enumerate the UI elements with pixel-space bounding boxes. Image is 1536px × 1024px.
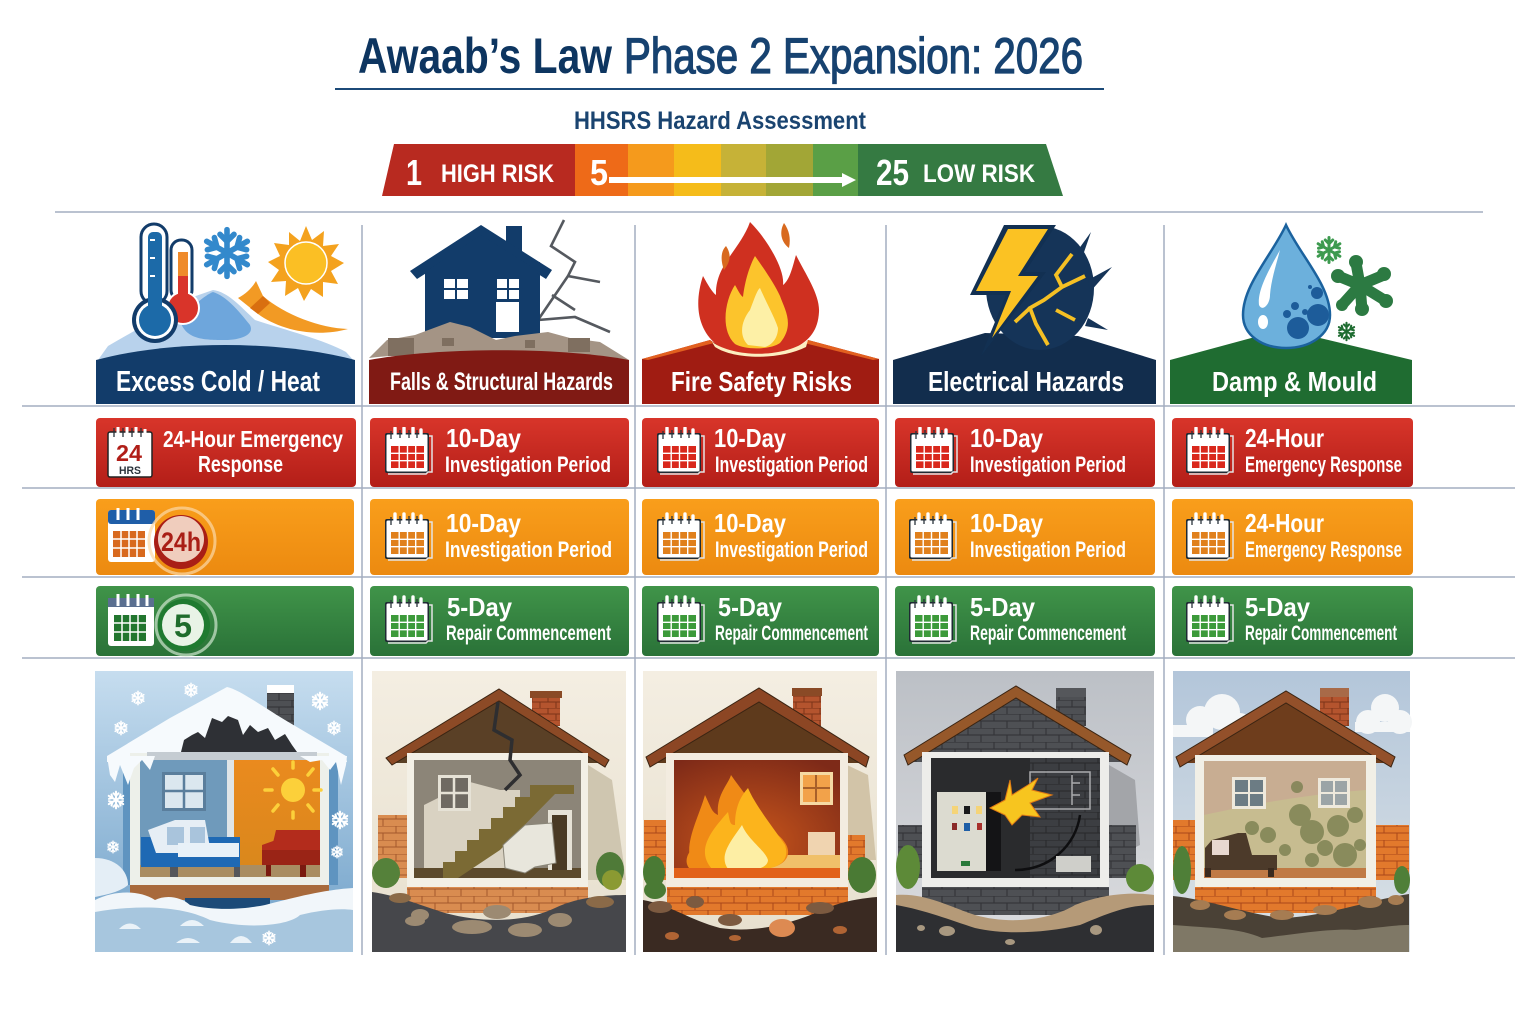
icon: snow mound (98, 290, 355, 362)
row 1 card: Falls 10-day: 10-Day (446, 423, 521, 453)
bushes (643, 856, 876, 899)
icon: calendar (385, 597, 432, 643)
stones (917, 925, 1102, 945)
icon: sun (268, 226, 344, 301)
column 5: Damp & Mould header: Damp & Mould (1212, 366, 1377, 397)
rubble (1190, 895, 1404, 920)
icon: yellow cracks (1015, 254, 1085, 345)
icon: 5 badge (156, 595, 216, 655)
row 3 card: Fire 5-day: Repair Commencement (715, 622, 868, 645)
icon: small thermometer (167, 240, 199, 324)
icon: calendar (909, 597, 956, 643)
window (800, 772, 833, 805)
row 2 card: Electrical 10-day: 10-Day (970, 508, 1043, 538)
row 1 card: Excess Cold 24-hour: 24-Hour Emergency (163, 426, 343, 452)
icon: 24 HRS calendar (108, 427, 152, 477)
icon: calendar (385, 514, 432, 560)
red armchair (262, 830, 320, 877)
icon: 5 badge: 5 (174, 608, 192, 644)
rubble (648, 896, 847, 941)
banner (893, 333, 1156, 404)
row 3 card: Electrical 5-day: 5-Day (970, 592, 1035, 622)
electrical cabinet (937, 792, 1001, 871)
column 4: Electrical Hazards header (893, 225, 1156, 404)
row 2 card: Falls 10-day: 10-Day (446, 508, 521, 538)
crack (494, 702, 520, 790)
icon: calendar (910, 428, 957, 474)
row 1 card: Damp 24-hour: 24-Hour (1245, 423, 1324, 453)
flames (687, 775, 788, 869)
banner (642, 340, 879, 404)
windows (1232, 777, 1350, 809)
icon: calendar (1186, 514, 1233, 560)
risk scale bar: 1 (406, 152, 422, 193)
bed (770, 832, 840, 871)
row 1 card: Fire 10-day: Investigation Period (715, 452, 868, 477)
row 3 card: Damp 5-day: Repair Commencement (1245, 622, 1397, 645)
icon: 24 HRS calendar: 24 (116, 440, 142, 466)
risk scale bar (382, 144, 1063, 196)
icon: calendar (657, 428, 704, 474)
row 3 card: Falls 5-day (370, 586, 629, 656)
row 1 card: Electrical 10-day (895, 418, 1155, 487)
icon: calendar (1186, 428, 1233, 474)
column 4: Electrical Hazards header: Electrical Hazards (928, 366, 1124, 397)
attic (181, 716, 297, 752)
icon: orange swoosh (238, 281, 348, 333)
row 2 card: Electrical 10-day (895, 499, 1155, 575)
staircase (443, 785, 574, 878)
icon: calendar (909, 514, 956, 560)
bushes (1173, 846, 1410, 894)
illustration: electrical house (896, 671, 1154, 952)
illustration: falls and structural house (372, 671, 626, 952)
icon: 24h badge: 24h (161, 527, 201, 557)
sun (265, 762, 321, 818)
row 3 card: Damp 5-day (1172, 586, 1413, 656)
icon: large thermometer (132, 224, 178, 343)
arrow: risk direction (609, 173, 856, 187)
icon: house (410, 225, 552, 338)
row 3 card: Fire 5-day (642, 586, 879, 656)
row 3 card: Fire 5-day: 5-Day (718, 592, 782, 622)
column 1: Excess Cold / Heat header: Excess Cold / Heat (116, 366, 320, 398)
illustration: fire house (643, 671, 877, 952)
column 2: Falls & Structural Hazards header: Falls & Structural Hazards (390, 368, 613, 396)
sofa (1205, 833, 1277, 877)
icicles (107, 756, 347, 785)
rubble (389, 893, 614, 937)
title: Phase 2 Expansion: 2026 (624, 28, 1083, 84)
mould blotches (1245, 781, 1366, 867)
row 2 card: Fire 10-day: 10-Day (714, 508, 786, 538)
snowflakes (108, 683, 347, 945)
risk scale bar: 25 (876, 152, 909, 193)
risk scale bar: 5 (590, 152, 608, 193)
row 3 card: Damp 5-day: 5-Day (1245, 592, 1310, 622)
row 1 card: Electrical 10-day: Investigation Period (970, 452, 1126, 477)
row 1 card: Fire 10-day: 10-Day (714, 423, 786, 453)
row 3 card: Electrical 5-day: Repair Commencement (970, 622, 1126, 645)
column 3: Fire Safety Risks header: Fire Safety Risks (671, 366, 852, 397)
clouds (1173, 694, 1412, 737)
icon: calendar (1186, 597, 1233, 643)
risk scale bar: LOW RISK (923, 160, 1035, 188)
icon: small mould spore (1318, 238, 1340, 262)
row 1 card: Falls 10-day (370, 418, 629, 487)
row 2 card: Falls 10-day: Investigation Period (445, 537, 612, 562)
icon: calendar (108, 508, 155, 562)
row 1 card: Falls 10-day: Investigation Period (445, 452, 611, 477)
icon: calendar (657, 597, 704, 643)
icon: snowflake (207, 230, 247, 276)
icon: calendar (108, 594, 154, 646)
icon: water drop (1243, 225, 1330, 348)
illustration: damp and mould house (1173, 671, 1412, 952)
subtitle: HHSRS Hazard Assessment: HHSRS Hazard Assessment (574, 107, 867, 135)
row 3 card: Excess Cold 5-day (96, 586, 354, 656)
row 3 card: Falls 5-day: Repair Commencement (446, 622, 611, 645)
title (335, 28, 1104, 90)
icon: calendar (657, 514, 704, 560)
row 2 card: Excess Cold 24h (96, 499, 354, 575)
row 2 card: Damp 24-hour: 24-Hour (1245, 508, 1324, 538)
small box (1056, 856, 1091, 872)
banner (1170, 337, 1412, 404)
icon: rubble (369, 322, 629, 360)
column 1: Excess Cold / Heat header (96, 224, 355, 404)
row 1 card: Excess Cold 24-hour: Response (198, 451, 283, 477)
icon: flame (698, 222, 819, 357)
icon: crack (538, 220, 610, 332)
bushes (896, 845, 1154, 892)
row 1 card: Electrical 10-day: 10-Day (970, 423, 1043, 453)
cable (1015, 815, 1080, 870)
title: Awaab’s Law (358, 28, 612, 84)
row 2 card: Damp 24-hour (1172, 499, 1413, 575)
row 1 card: Excess Cold 24-hour (96, 418, 356, 487)
column 3: Fire Safety Risks header (642, 222, 879, 404)
icon: calendar (385, 428, 432, 474)
snow roof (107, 687, 347, 762)
window (438, 775, 471, 811)
row 2 card: Fire 10-day (642, 499, 879, 575)
icon: lightning bolt (970, 225, 1056, 356)
icon: large mould spore (1331, 255, 1393, 316)
row 1 card: Damp 24-hour (1172, 418, 1413, 487)
risk scale bar: HIGH RISK (441, 160, 554, 188)
icon: 24h badge (149, 508, 215, 574)
row 1 card: Damp 24-hour: Emergency Response (1245, 452, 1402, 477)
illustration: cold and heat house (95, 671, 353, 952)
bushes (372, 852, 624, 890)
row 2 card: Damp 24-hour: Emergency Response (1245, 537, 1402, 562)
banner (369, 350, 629, 404)
icon: 24 HRS calendar: HRS (119, 465, 141, 477)
icon: tiny mould spore (1339, 323, 1354, 340)
row 2 card: Fire 10-day: Investigation Period (715, 537, 868, 562)
banner (96, 345, 355, 404)
breaker box (1030, 772, 1090, 809)
column 2: Falls & Structural Hazards header (369, 220, 629, 404)
icon: dark orb with spikes (986, 226, 1112, 350)
row 1 card: Fire 10-day (642, 418, 879, 487)
row 2 card: Electrical 10-day: Investigation Period (970, 537, 1126, 562)
row 3 card: Falls 5-day: 5-Day (447, 592, 512, 622)
spark (990, 778, 1052, 825)
row 3 card: Electrical 5-day (895, 586, 1155, 656)
column 5: Damp & Mould header (1170, 225, 1412, 404)
fallen panels (503, 823, 556, 873)
blue sofa (141, 820, 240, 877)
window (162, 772, 206, 811)
row 2 card: Falls 10-day (370, 499, 629, 575)
